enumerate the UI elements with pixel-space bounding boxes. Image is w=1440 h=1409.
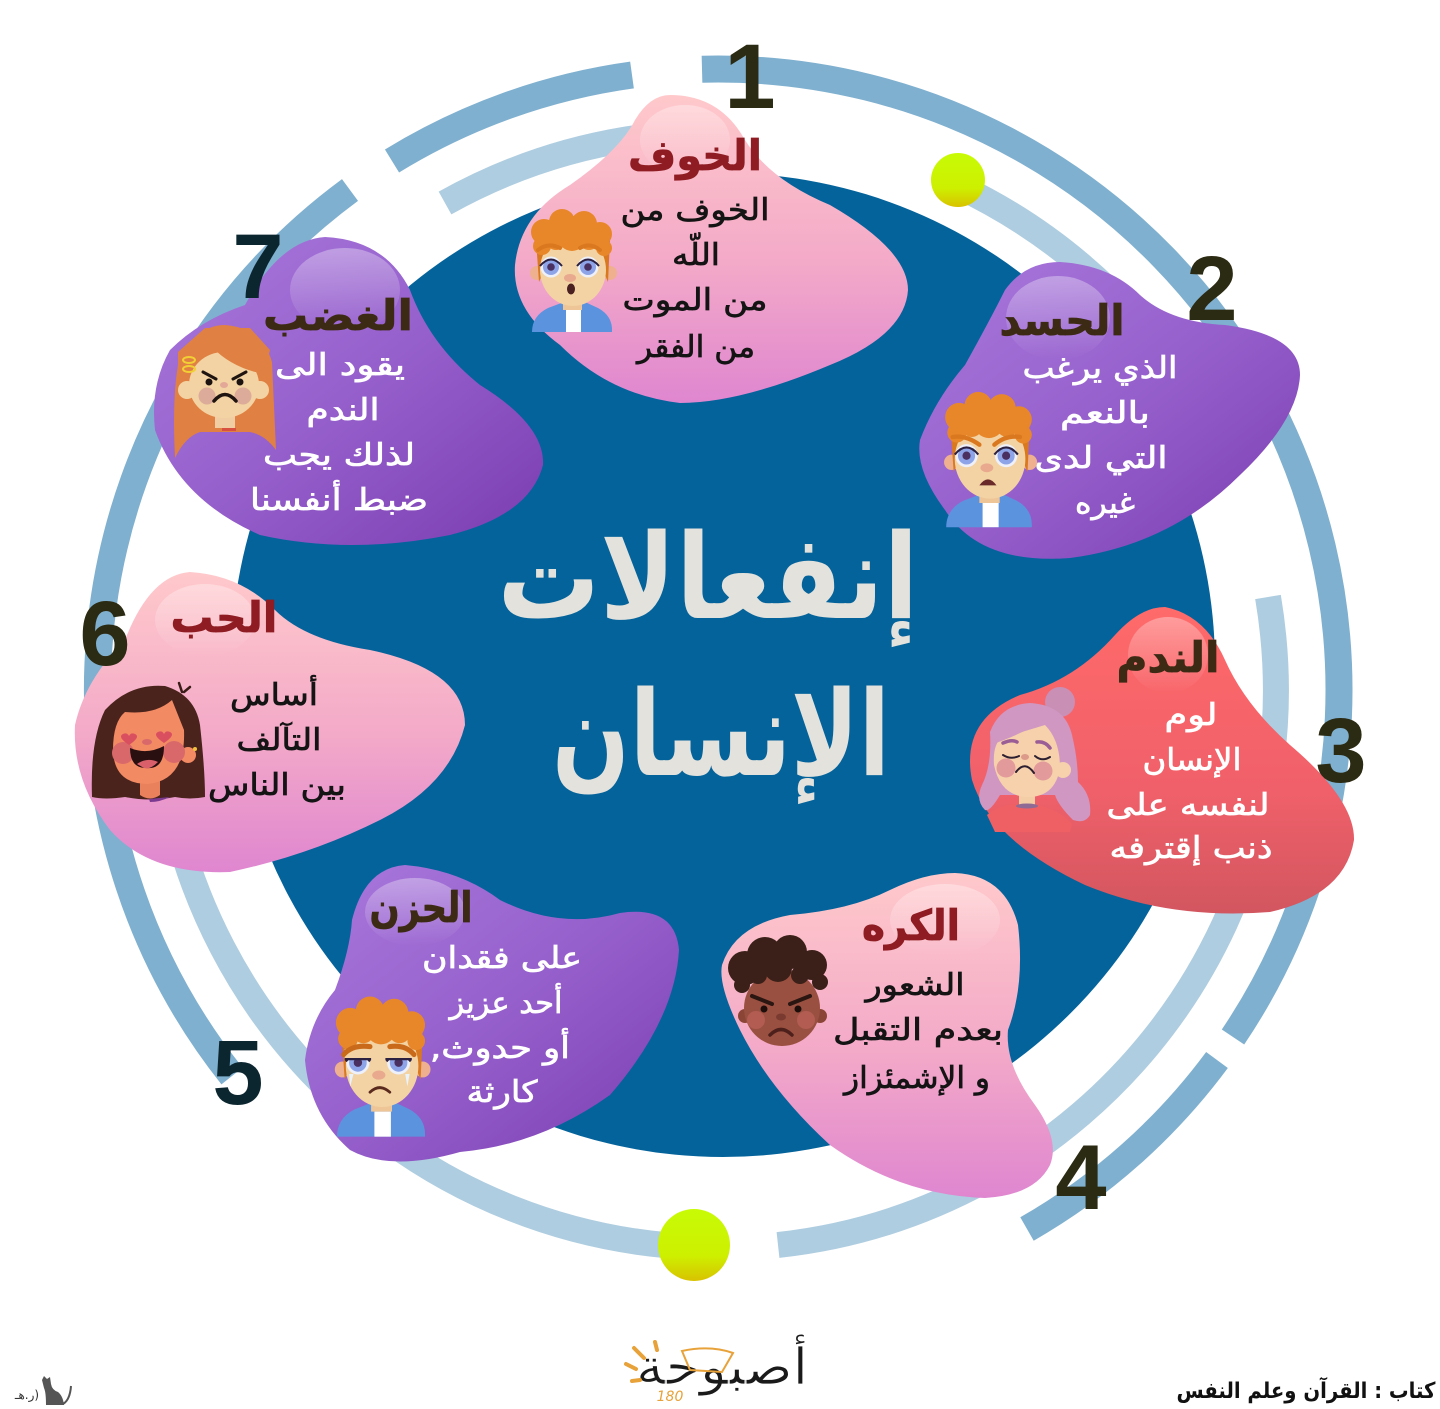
icon: scared boy bbox=[530, 209, 617, 332]
text: love: بين الناس bbox=[208, 768, 346, 803]
text: fear: من الموت bbox=[622, 283, 768, 318]
text: fear: اللّه bbox=[672, 232, 720, 273]
text: envy: التي لدى bbox=[1034, 441, 1168, 476]
text: anger: يقود الى bbox=[275, 348, 405, 383]
text: regret bbox=[1106, 698, 1272, 866]
logo: أصبوحة bbox=[636, 1334, 808, 1396]
icon: angry girl bbox=[174, 325, 276, 458]
text: regret: لنفسه على bbox=[1106, 788, 1270, 823]
panel: regret bbox=[970, 607, 1354, 913]
heading: regret: الندم bbox=[1116, 633, 1220, 683]
logo number: 180 bbox=[657, 1389, 683, 1405]
heading: hatred: الكره bbox=[862, 901, 960, 951]
text: sadness bbox=[422, 941, 582, 1110]
number 2: 2 bbox=[1186, 238, 1238, 340]
highlight bbox=[1128, 617, 1208, 693]
text: sadness: على فقدان bbox=[422, 941, 582, 976]
heading: love: الحب bbox=[170, 593, 278, 642]
text: envy bbox=[1022, 351, 1178, 521]
panel: anger bbox=[154, 237, 543, 545]
text: fear bbox=[620, 193, 770, 365]
text: envy: الذي يرغب bbox=[1022, 351, 1178, 386]
number 1: 1 bbox=[724, 26, 776, 128]
title: الإنسان bbox=[552, 665, 890, 804]
icon: angry dark-haired boy bbox=[728, 935, 828, 1046]
icon: sad girl bbox=[979, 687, 1090, 832]
text: fear: من الفقر bbox=[635, 330, 755, 365]
central blue circle bbox=[231, 173, 1215, 1157]
highlight bbox=[365, 878, 465, 946]
icon: smiling girl with heart eyes bbox=[92, 683, 205, 802]
text: fear: الخوف من bbox=[620, 193, 770, 228]
text: hatred: و الإشمئزاز bbox=[842, 1061, 990, 1096]
number 3: 3 bbox=[1315, 700, 1367, 802]
highlight bbox=[640, 105, 730, 175]
text: envy: غيره bbox=[1075, 486, 1135, 521]
panel: hatred bbox=[721, 873, 1053, 1198]
title: إنفعالات bbox=[498, 508, 918, 647]
title bbox=[498, 508, 918, 804]
text: sadness: كارثة bbox=[466, 1075, 538, 1110]
text: anger: لذلك يجب bbox=[263, 438, 415, 473]
panel: love bbox=[75, 572, 465, 872]
icon: envious boy bbox=[944, 392, 1037, 527]
text: hatred bbox=[833, 968, 1003, 1096]
text: love: أساس bbox=[230, 674, 318, 713]
number 4: 4 bbox=[1055, 1127, 1107, 1229]
logo bbox=[626, 1334, 808, 1405]
text: sadness: أو حدوث, bbox=[430, 1027, 570, 1066]
text: sadness: أحد عزيز bbox=[447, 982, 562, 1021]
highlight bbox=[155, 584, 255, 656]
heading: fear: الخوف bbox=[628, 131, 762, 181]
text: hatred: بعدم التقبل bbox=[833, 1013, 1003, 1048]
highlight bbox=[1006, 276, 1110, 360]
highlight bbox=[290, 248, 400, 332]
number 7: 7 bbox=[232, 216, 284, 318]
heading: sadness: الحزن bbox=[370, 883, 472, 933]
text: envy: بالنعم bbox=[1060, 396, 1150, 431]
text: regret: ذنب إقترفه bbox=[1110, 831, 1272, 866]
logo book bbox=[682, 1348, 733, 1372]
heading: anger: الغضب bbox=[263, 291, 413, 340]
panel: envy bbox=[919, 262, 1300, 559]
decorative ring segments bbox=[97, 69, 1339, 1247]
highlight bbox=[890, 884, 1000, 956]
text: anger: ضبط أنفسنا bbox=[250, 479, 428, 518]
logo sun rays bbox=[626, 1342, 657, 1381]
cat signature: (ر.هـ bbox=[14, 1388, 39, 1403]
text: regret: الإنسان bbox=[1142, 743, 1242, 778]
text: anger: الندم bbox=[306, 393, 380, 428]
text: hatred: الشعور bbox=[863, 968, 964, 1003]
panel: sadness bbox=[305, 865, 679, 1162]
text: anger bbox=[250, 348, 428, 518]
yellow dot: top right bbox=[931, 153, 985, 207]
icon: crying boy bbox=[335, 996, 430, 1137]
panel: fear bbox=[515, 95, 908, 403]
number 5: 5 bbox=[212, 1022, 264, 1124]
yellow dot: bottom bbox=[658, 1209, 730, 1281]
heading: envy: الحسد bbox=[1000, 296, 1124, 345]
cat signature bbox=[14, 1376, 71, 1405]
text: regret: لوم bbox=[1164, 698, 1218, 733]
number 6: 6 bbox=[79, 583, 131, 685]
text: love bbox=[208, 674, 346, 803]
text: love: التآلف bbox=[236, 722, 322, 758]
